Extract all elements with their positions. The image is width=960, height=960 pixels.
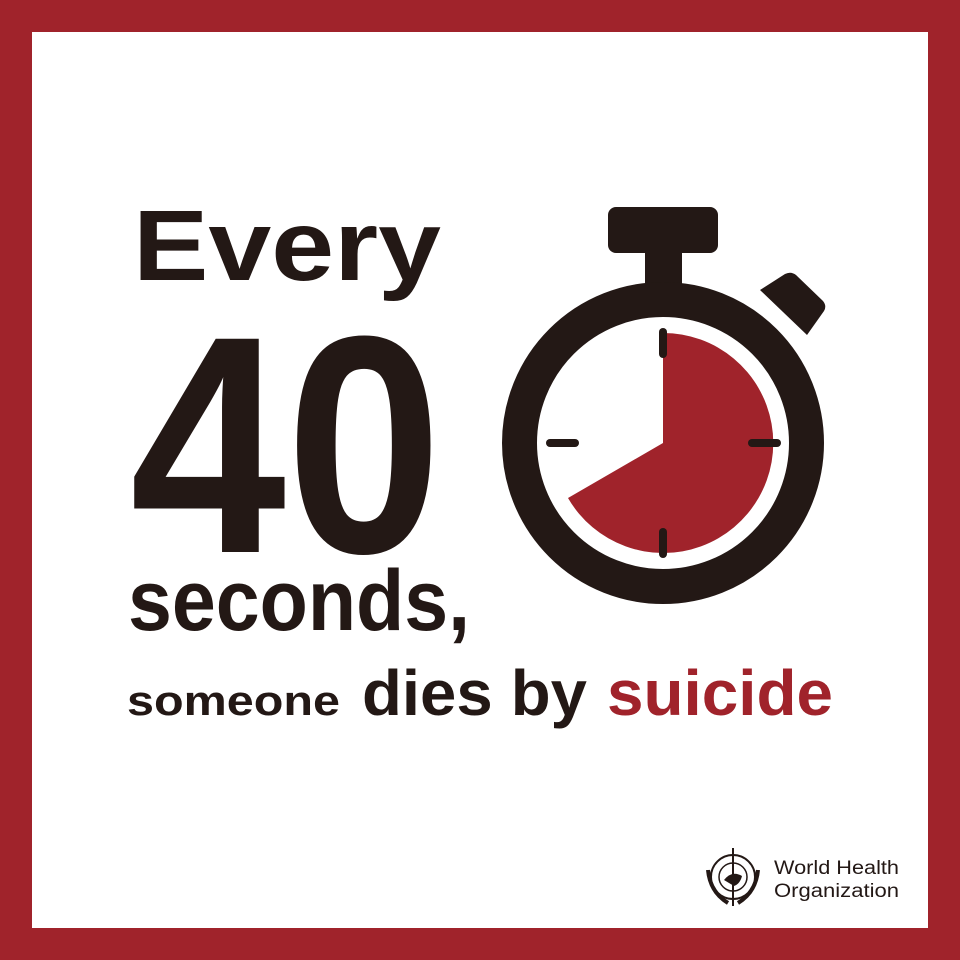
subline: dies by [362, 657, 587, 729]
headline text [127, 190, 833, 729]
logo: WHO [708, 848, 899, 906]
icon: stopwatch [520, 207, 825, 586]
subline: someone [127, 677, 340, 724]
subline: suicide [607, 657, 833, 729]
red wedge [568, 333, 773, 553]
logo: WHO: Organization [774, 881, 899, 902]
number: 40: 40 [130, 271, 442, 618]
logo: WHO: World Health [774, 858, 899, 879]
word: Every: Every [133, 190, 441, 302]
word: seconds: seconds, [128, 553, 470, 649]
